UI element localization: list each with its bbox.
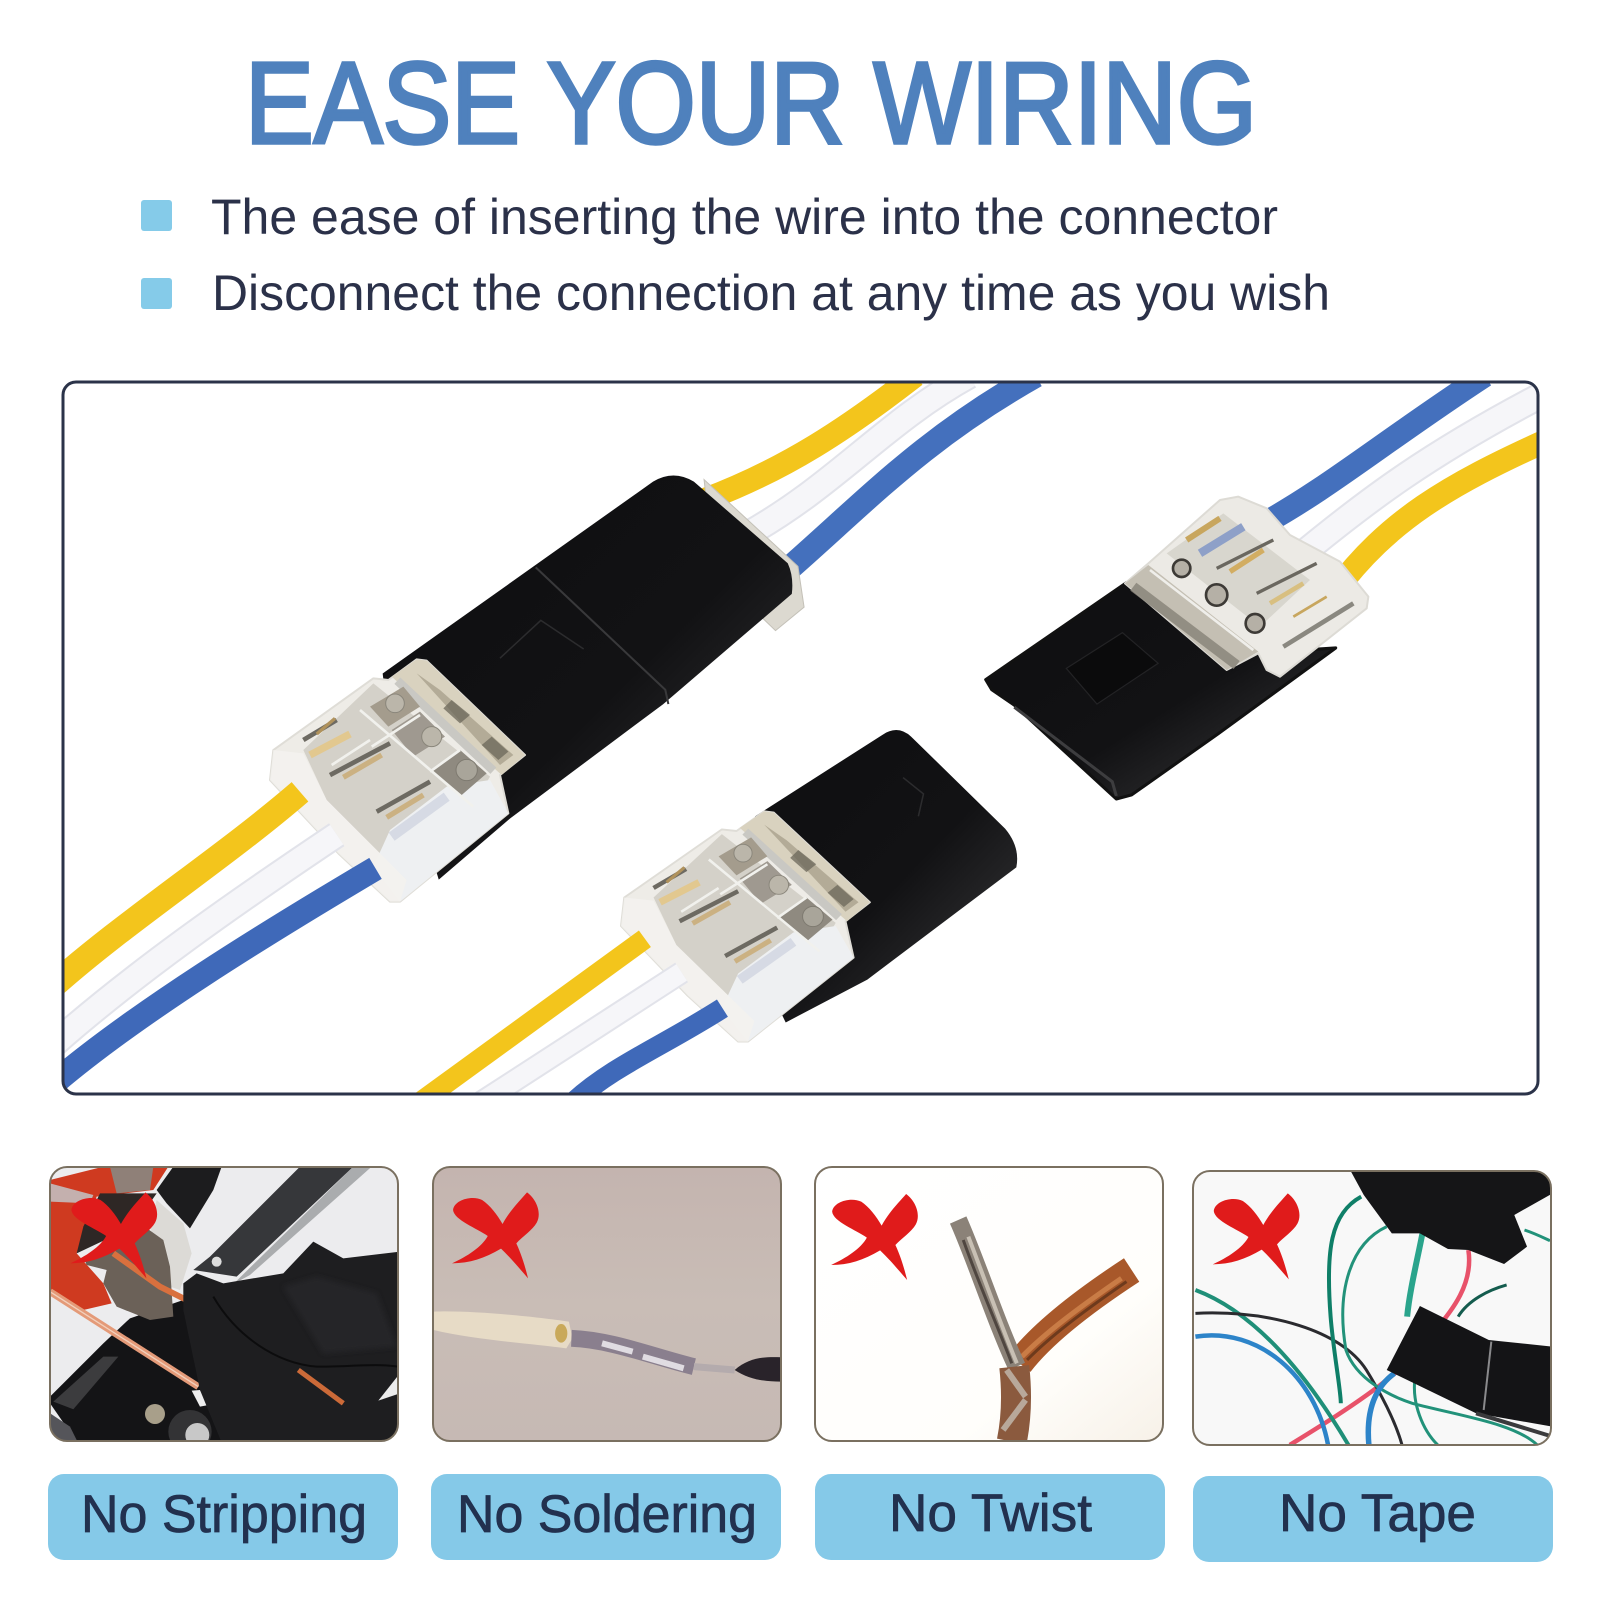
connector: lower plug body [735,730,1017,1022]
red tool [50,1167,168,1310]
wires: lower connector [420,939,722,1102]
wires: upper right connector [1268,384,1536,582]
cutter blade [150,1200,192,1290]
label: no tape [1193,1476,1553,1562]
upper glove [157,1167,222,1228]
label: no soldering: No Soldering [457,1485,757,1544]
connector: upper right socket body [986,583,1336,799]
pink twin wire [50,1292,198,1387]
panel: no tape photo [1193,1171,1553,1445]
black tape [1387,1306,1553,1427]
wires: joined connector, upper right [704,376,1036,571]
grey strand [958,1220,1017,1367]
panel: no twist photo [815,1167,1163,1442]
panel: no soldering photo [433,1167,783,1441]
bullet text 1: The ease of inserting the wire into the connector [211,189,1278,245]
bullet marker 2 [141,278,172,309]
panel: connector photo [51,376,1546,1102]
coloured wires [1290,1250,1469,1445]
connector: upper right clear housing [1125,497,1368,677]
icon: red cross [452,1192,539,1278]
bullet text 2: Disconnect the connection at any time as you wish [212,265,1330,321]
label: no twist [815,1474,1165,1560]
label: no twist: No Twist [889,1484,1092,1543]
label: no tape: No Tape [1279,1484,1476,1543]
black gloved fingers [1351,1172,1553,1264]
label: no stripping: No Stripping [81,1485,367,1544]
black circuit board [51,1300,220,1440]
icon: red cross [831,1194,918,1280]
cream heat-shrink tube [434,1311,572,1348]
label: no stripping [48,1474,398,1560]
soldered twist [571,1338,694,1367]
main glove [183,1242,400,1447]
icon: red cross [1213,1193,1299,1279]
bullet list [141,189,1330,321]
label: no soldering [431,1474,781,1560]
orange wire [112,1251,184,1302]
connector: joined pair [383,476,804,880]
wires: joined connector, lower left [51,792,376,1086]
panel: no stripping photo [50,1167,400,1453]
black insulated end [735,1357,783,1382]
connector: clear housing left [270,659,525,902]
icon: red cross [70,1192,157,1278]
ruler strip [193,1167,353,1277]
connector: lower clear housing [621,811,870,1042]
twisted stem [1012,1367,1016,1442]
copper strand [1019,1270,1132,1363]
bullet marker 1 [141,200,172,231]
title: EASE YOUR WIRING [245,38,1257,168]
